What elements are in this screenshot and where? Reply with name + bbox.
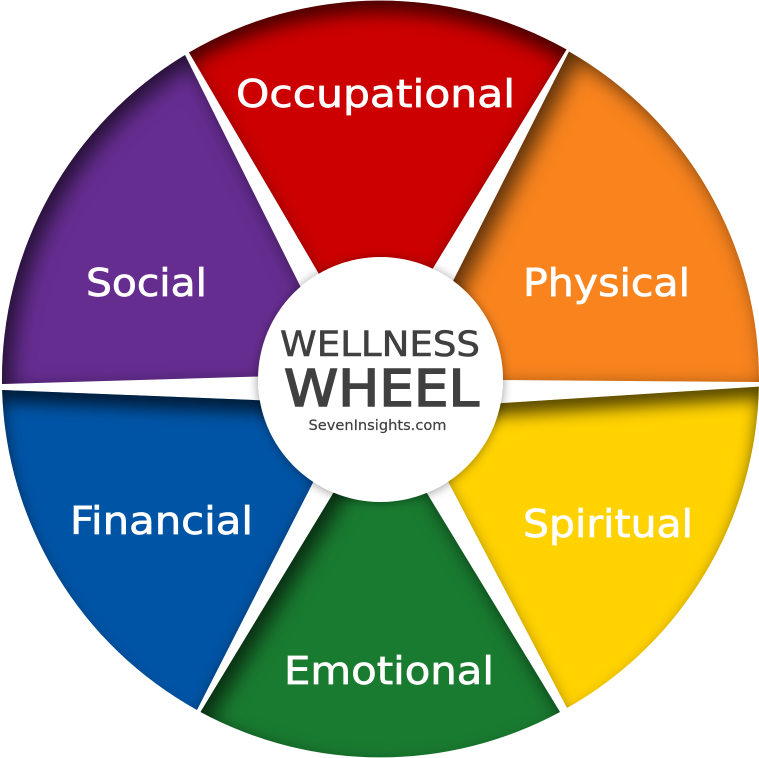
segment: physical: [403, 52, 759, 382]
label: Occupational: Occupational: [236, 72, 515, 116]
hub title line 2: WHEEL: [284, 360, 480, 419]
segment: social: [2, 55, 344, 384]
label: Emotional: Emotional: [284, 649, 494, 693]
segment: spiritual: [410, 387, 759, 708]
hub circle: [258, 257, 503, 502]
segment: emotional: [200, 416, 560, 757]
label: Spiritual: Spiritual: [523, 502, 693, 546]
label: Social: Social: [86, 261, 207, 305]
label: Financial: Financial: [70, 499, 253, 543]
hub website: SevenInsights.com: [308, 418, 446, 434]
segment: occupational: [189, 1, 566, 378]
center hub: [258, 257, 503, 502]
hub title line 1: WELLNESS: [280, 325, 480, 365]
label: Physical: Physical: [523, 261, 690, 305]
segment: financial: [2, 390, 353, 710]
